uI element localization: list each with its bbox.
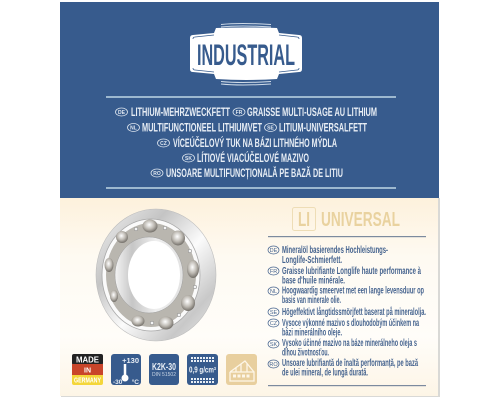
product names in seven languages: RO [153, 171, 161, 177]
product descriptions in seven languages [268, 245, 426, 378]
panel: cream lower section [60, 198, 440, 397]
icon: temperature range: +130 [122, 356, 139, 365]
icon: made in germany: MADE [76, 356, 100, 364]
product names in seven languages: SK [185, 156, 192, 162]
product names in seven languages: UNSOARE MULTIFUNCȚIONALĂ PE BAZĂ DE LITIU [166, 167, 343, 180]
product names in seven languages: LITIUM-UNIVERSALFETT [279, 122, 367, 134]
product names in seven languages: NL [130, 126, 137, 132]
product descriptions in seven languages: de ulei mineral, de lungă durată. [282, 368, 368, 378]
product names in seven languages: CZ [160, 141, 167, 147]
product descriptions in seven languages: dlhou životnosťou. [282, 348, 329, 358]
product descriptions in seven languages: SK [270, 342, 277, 348]
product descriptions in seven languages: FR [270, 269, 277, 275]
panel: blue header section [60, 2, 439, 198]
rule: description top [268, 236, 426, 237]
product names in seven languages: LITHIUM-MEHRZWECKFETT [131, 107, 230, 119]
icon: made in germany [72, 354, 103, 385]
product descriptions in seven languages: bázi minerálního oleje. [282, 328, 342, 338]
icon: density [187, 354, 218, 385]
product names in seven languages: SE [267, 126, 274, 132]
product names in seven languages: GRAISSE MULTI-USAGE AU LITHIUM [247, 107, 377, 119]
product descriptions in seven languages: basis van minerale olie. [282, 295, 341, 306]
product names in seven languages: MULTIFUNCTIONEEL LITHIUMVET [142, 122, 262, 134]
rule: header bottom [106, 187, 396, 189]
icon: k2k-30 din 51502 [149, 354, 179, 385]
icon: greenhouse [226, 354, 257, 385]
icon: made in germany: IN [84, 368, 91, 374]
icon: density: 0,9 g/cm³ [189, 366, 216, 374]
badge title: INDUSTRIAL [197, 39, 295, 72]
product descriptions in seven languages: Mineralöl basierendes Hochleistungs- [282, 245, 388, 256]
product descriptions in seven languages: NL [270, 289, 277, 295]
product names in seven languages: VÍCEÚČELOVÝ TUK NA BÁZI LITHNÉHO MÝDLA [173, 137, 337, 150]
product mark: li universal [292, 208, 400, 231]
product mark: li universal: LI [298, 209, 310, 231]
icon: temperature range: -30 [113, 379, 123, 386]
icon: made in germany: GERMANY [74, 378, 101, 384]
badge: industrial [190, 24, 302, 85]
rule: description bottom [268, 385, 426, 386]
ball bearing [96, 209, 216, 341]
product descriptions in seven languages: RO [269, 362, 278, 368]
product names in seven languages: LÍTIOVÉ VIACÚČELOVÉ MAZIVO [197, 152, 309, 165]
product names in seven languages: DE [118, 110, 126, 116]
icon: k2k-30 din 51502: DIN 51502 [152, 372, 176, 378]
product descriptions in seven languages: base d'huile minérale. [282, 276, 345, 286]
icon: k2k-30 din 51502: K2K-30 [152, 362, 176, 373]
product descriptions in seven languages: SE [270, 310, 277, 316]
product names in seven languages [116, 107, 377, 180]
product mark: li universal: UNIVERSAL [321, 209, 400, 231]
product names in seven languages: FR [236, 110, 243, 116]
product descriptions in seven languages: DE [270, 248, 278, 254]
product descriptions in seven languages: Longlife-Schmierfett. [282, 255, 342, 266]
icon: temperature range [111, 354, 141, 386]
icon: temperature range: °C [132, 378, 139, 386]
product descriptions in seven languages: CZ [270, 321, 278, 327]
rule: header top [106, 96, 396, 98]
